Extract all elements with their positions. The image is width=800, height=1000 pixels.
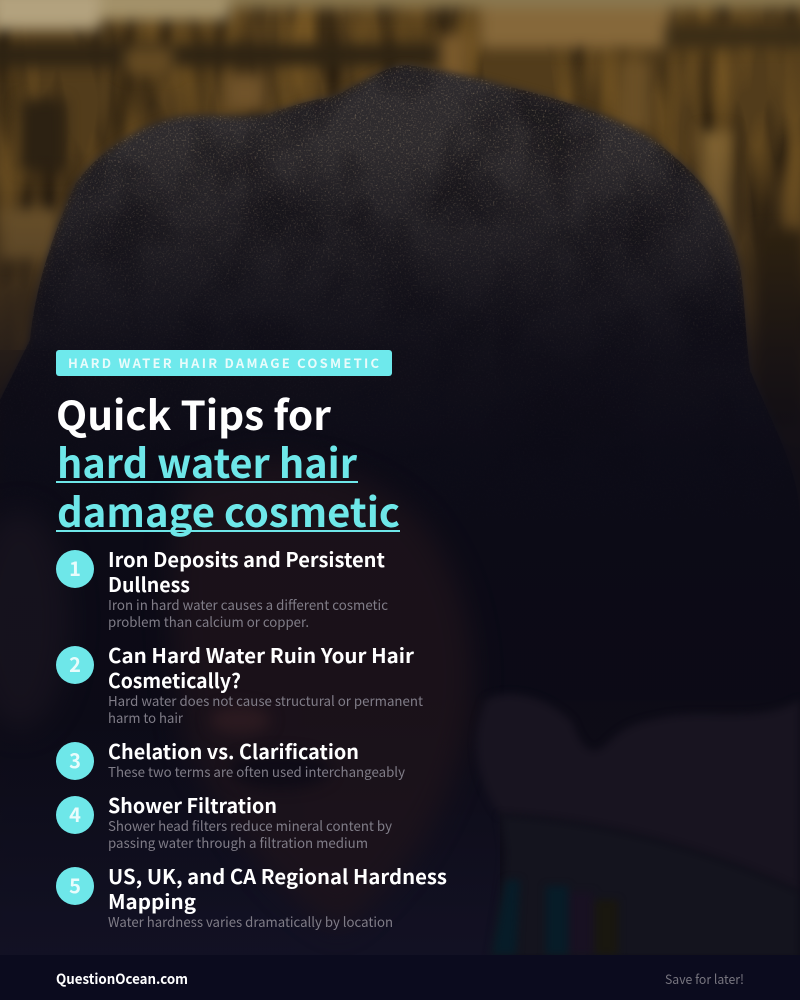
tip 2 [56, 640, 423, 727]
shirt stripes [492, 880, 618, 955]
title: Quick Tips for [56, 384, 332, 442]
tip 3: Chelation vs. Clarification [108, 736, 359, 765]
footer bar: Save for later! [665, 969, 744, 988]
tip 5: Mapping [108, 886, 196, 915]
tip 1: 1 [69, 553, 81, 582]
face [172, 459, 473, 930]
tip 5: Water hardness varies dramatically by location [108, 911, 393, 931]
tip 2: Cosmetically? [108, 665, 241, 694]
shirt [490, 815, 800, 960]
tip 1: Dullness [108, 569, 190, 598]
tip 2: harm to hair [108, 707, 184, 727]
tip 1: Iron in hard water causes a different cosmetic [108, 594, 388, 614]
footer bar [0, 955, 800, 1000]
left background patch [0, 510, 70, 730]
tip 2: 2 [69, 649, 81, 678]
tip 3: These two terms are often used interchangeably [108, 761, 405, 781]
tag pill [56, 350, 392, 376]
tip 1: problem than calcium or copper. [108, 611, 309, 631]
tip 4 [56, 790, 392, 852]
tip 2: Can Hard Water Ruin Your Hair [108, 640, 414, 669]
tip 4: passing water through a filtration medium [108, 832, 368, 852]
tip 5 [56, 861, 447, 931]
tip 4: Shower head filters reduce mineral content by [108, 815, 392, 835]
tip 5: 5 [69, 870, 81, 899]
title: hard water hair [57, 432, 358, 490]
tip 4: 4 [69, 799, 81, 828]
tip 1: Iron Deposits and Persistent [108, 544, 386, 573]
title [56, 384, 400, 539]
neck [476, 694, 800, 892]
tip 5: US, UK, and CA Regional Hardness [108, 861, 447, 890]
tip 3: 3 [69, 745, 81, 774]
lower-left navy wash [0, 720, 500, 1000]
tag pill: HARD WATER HAIR DAMAGE COSMETIC [68, 353, 379, 372]
footer bar: QuestionOcean.com [56, 969, 188, 989]
tip 3 [56, 736, 405, 781]
tip 2: Hard water does not cause structural or permanent [108, 690, 423, 710]
title: damage cosmetic [57, 481, 400, 539]
tip 1 [56, 544, 388, 631]
tip 4: Shower Filtration [108, 790, 277, 819]
